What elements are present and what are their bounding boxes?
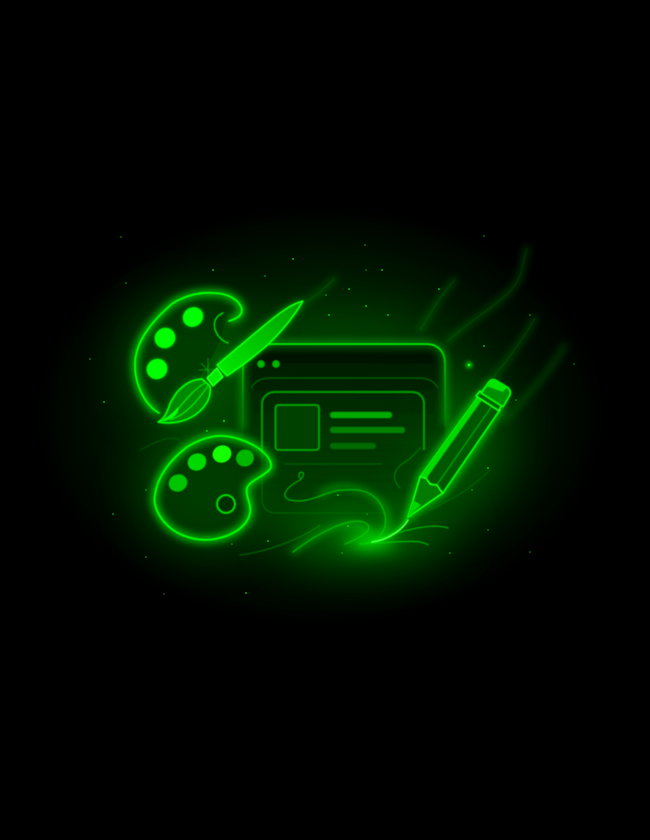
paintbrush [158,301,303,423]
window frame [243,344,445,430]
swirl strands [140,438,490,555]
paint wells [143,303,207,383]
pencil eraser [481,380,510,407]
ink swirl [140,438,490,555]
palette outline [154,436,271,540]
paint wells [166,443,256,513]
pencil body [420,397,500,493]
window control dots [257,360,280,368]
brush handle [217,301,303,376]
palette upper [135,293,242,413]
palette lower [154,436,271,540]
browser window [243,344,445,513]
palette outline [135,293,242,413]
image placeholder [276,405,319,450]
content card [262,392,424,470]
background glow [35,205,605,625]
thumb hole hook [214,313,228,343]
stars [89,235,575,595]
text bars [330,412,405,449]
card divider [285,463,382,465]
bright sparkle star [466,362,472,368]
brush bristles [158,379,210,423]
pencil ferrule [476,391,502,411]
pencil tip [408,477,443,517]
smoke wisps upper right and upper left [280,248,565,420]
sparkle [199,358,215,378]
pencil [408,380,510,517]
brush ferrule [207,368,223,386]
toolbar line [251,378,438,388]
